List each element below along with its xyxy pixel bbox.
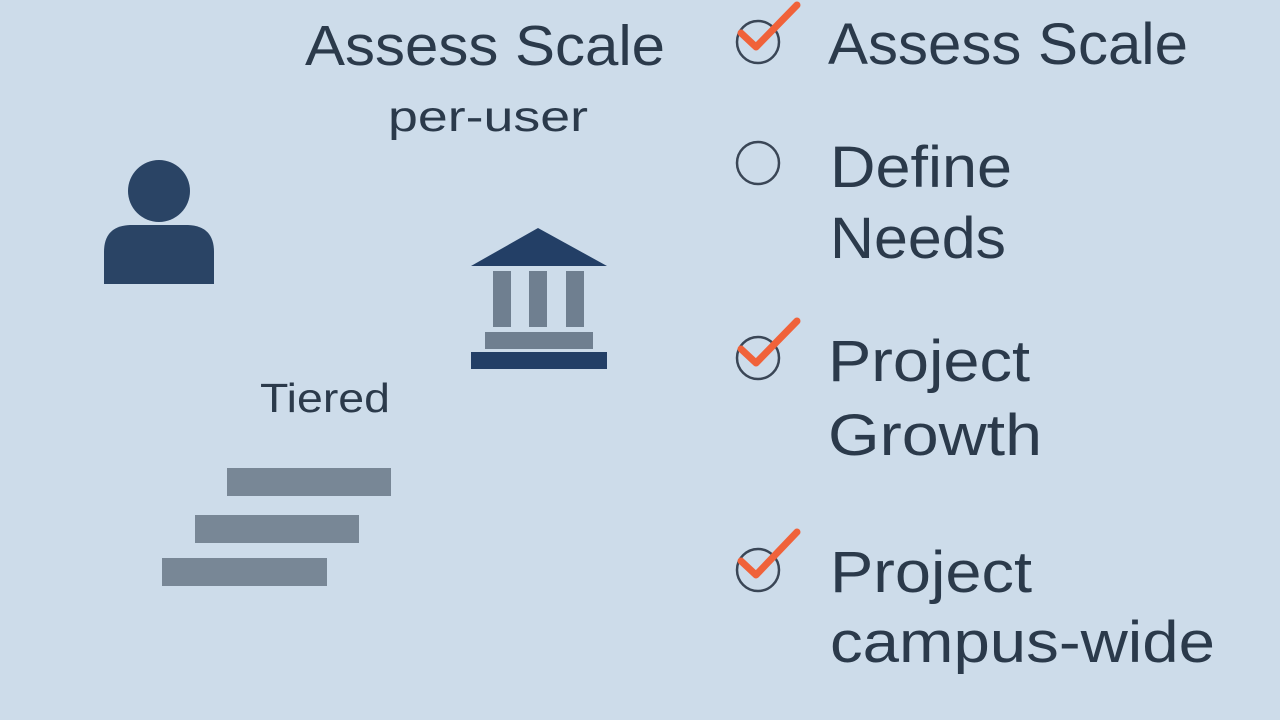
label: Tiered: Tiered — [260, 375, 390, 421]
icon: person — [104, 160, 214, 284]
item: Define Needs (unchecked) — [737, 135, 1012, 271]
title: Assess Scale: Assess Scale — [305, 14, 665, 78]
icon: institution building — [471, 228, 607, 369]
item: Assess Scale (checked): Assess Scale — [828, 12, 1188, 77]
item: Project Growth (checked) — [737, 321, 1042, 468]
item: Project campus-wide (checked): Project — [830, 540, 1032, 605]
item: Assess Scale (checked) — [737, 5, 1188, 77]
item: Define Needs (unchecked): Define — [830, 135, 1012, 200]
subtitle: per-user: per-user — [388, 93, 588, 141]
checklist — [737, 5, 1215, 675]
item: Define Needs (unchecked): Needs — [830, 206, 1006, 271]
item: Project campus-wide (checked) — [737, 532, 1215, 675]
item: Project Growth (checked): Project — [828, 329, 1030, 394]
item: Project Growth (checked): Growth — [828, 403, 1042, 468]
icon: tiered steps — [162, 468, 391, 586]
item: Project campus-wide (checked): campus-wide — [830, 610, 1215, 675]
